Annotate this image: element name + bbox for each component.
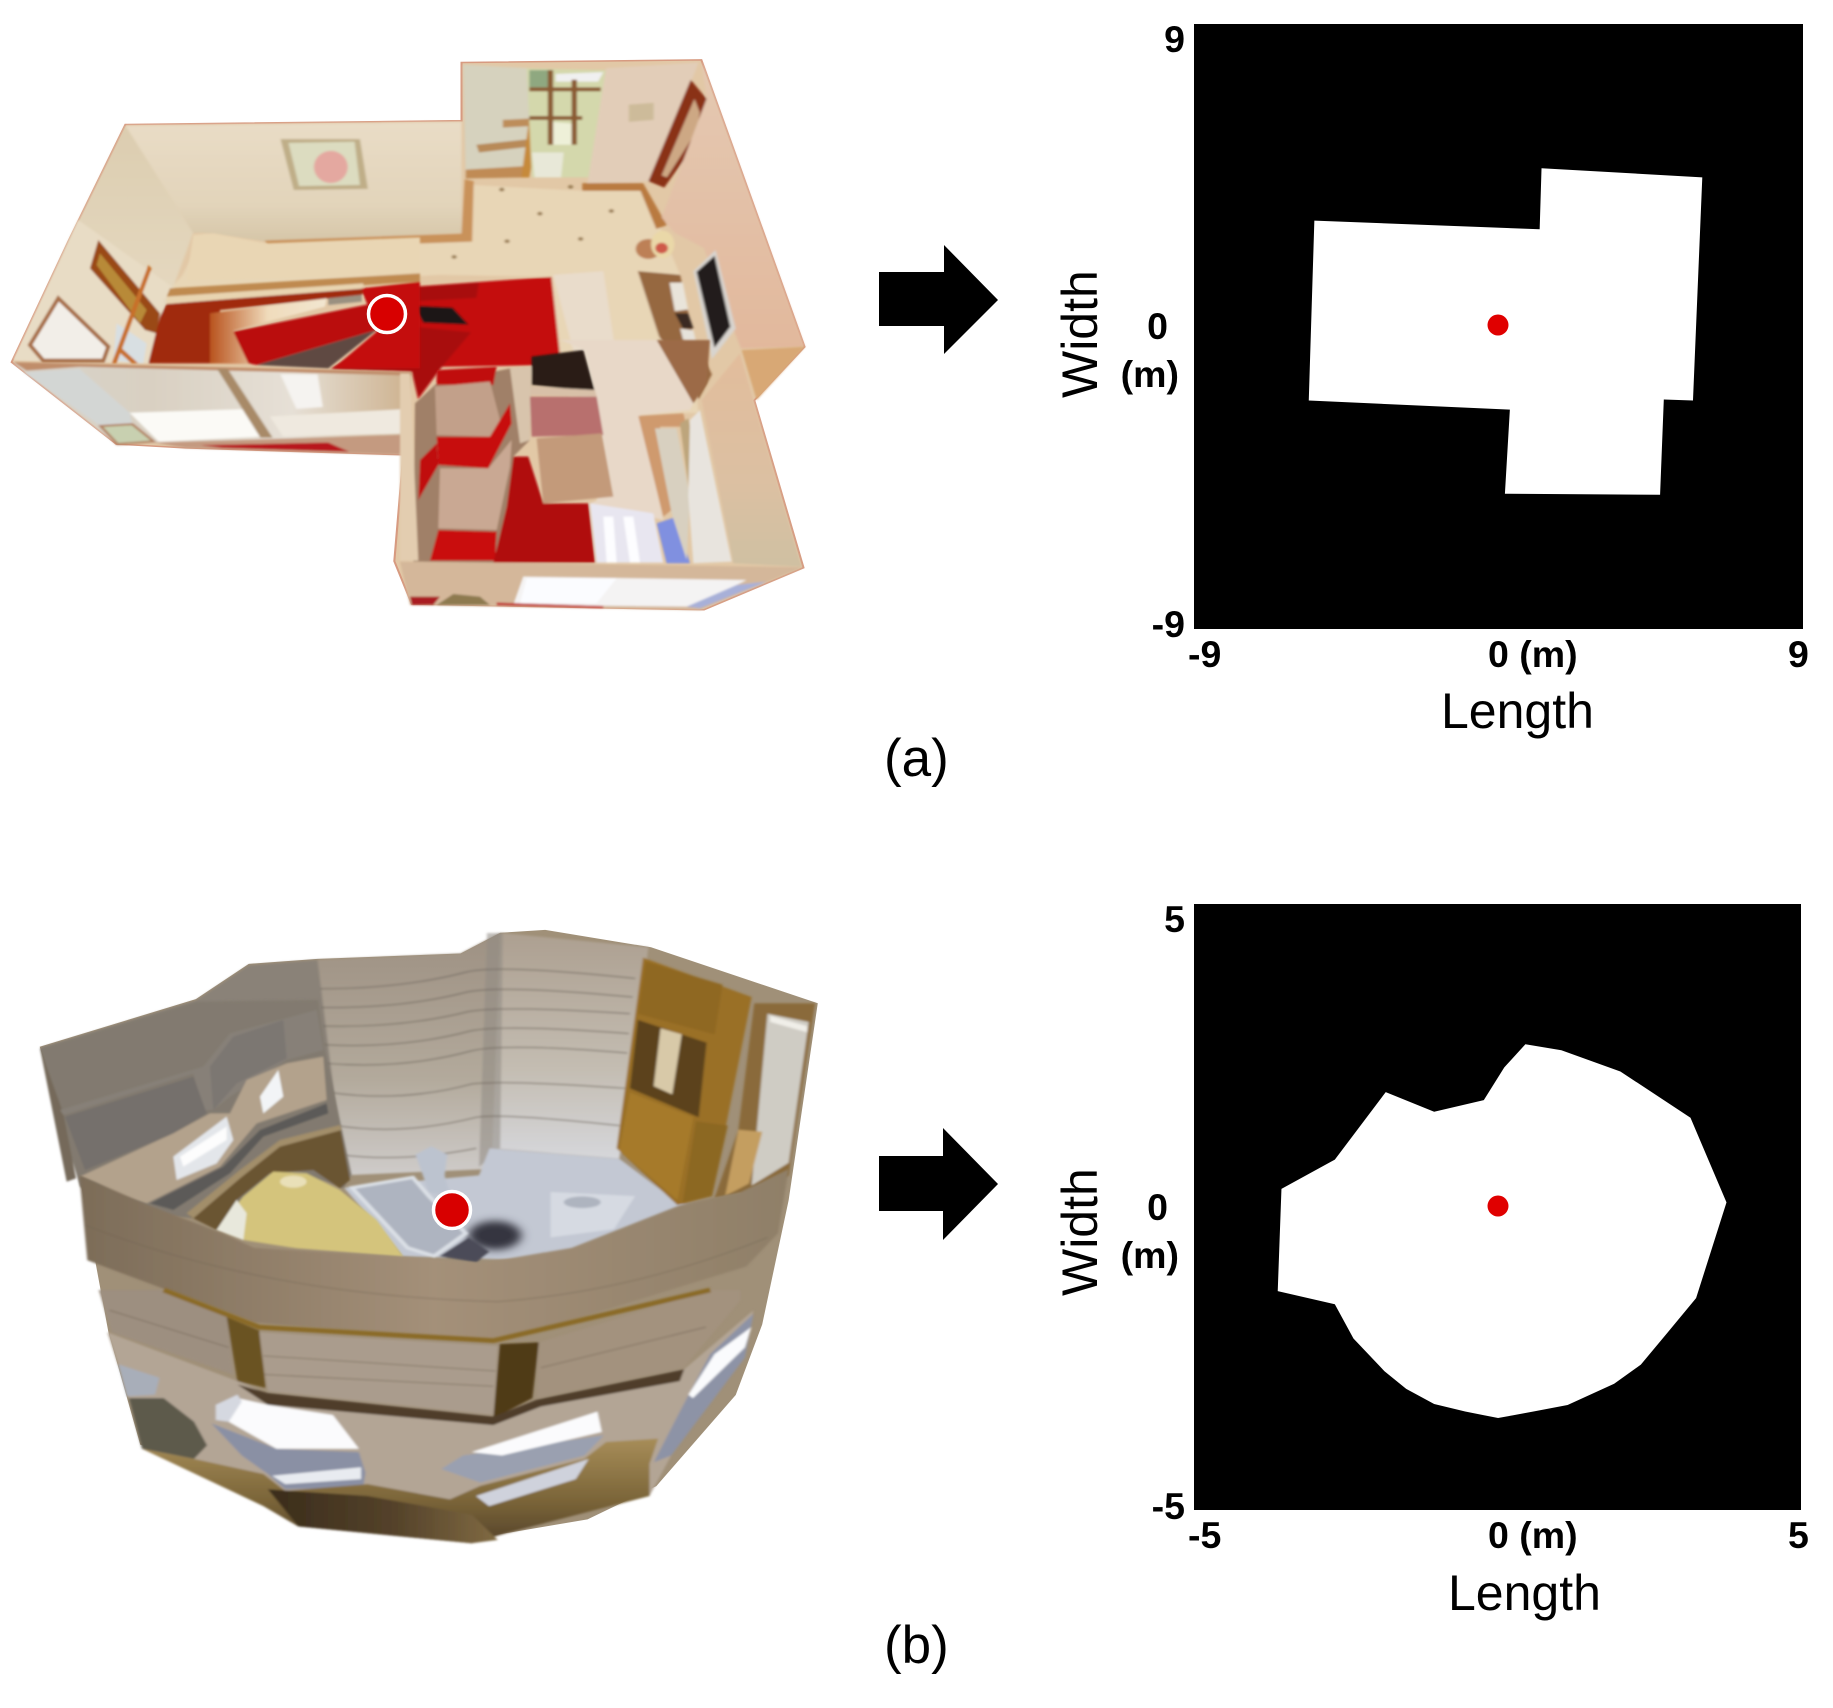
- axis labels (a): (m): [1121, 353, 1179, 395]
- upper grey wall: [60, 1010, 323, 1115]
- upper room contents: [15, 61, 805, 505]
- inner grey wall: [210, 1020, 287, 1110]
- bottom strip with red reflections: [153, 435, 403, 455]
- lower-right room of (a): [400, 340, 805, 610]
- axis labels (a): [1052, 18, 1809, 739]
- map background: [1194, 904, 1801, 1510]
- axis labels (b): 5: [1788, 1514, 1809, 1556]
- left wall: [13, 220, 177, 363]
- axis labels (b): 0: [1147, 1186, 1168, 1228]
- center panel: [259, 1332, 498, 1415]
- left back wall: [41, 960, 344, 1208]
- axis labels (b): 5: [1164, 898, 1185, 940]
- viewpoint dot: [1488, 314, 1508, 336]
- high door: [90, 240, 160, 333]
- red cushion: [233, 304, 377, 365]
- wide window: [173, 1117, 233, 1180]
- door: [648, 80, 707, 188]
- floor dark spot: [468, 1221, 521, 1250]
- hall wall: [588, 63, 699, 183]
- chart: floor map (b): [1194, 904, 1801, 1510]
- base floor band: [142, 1439, 658, 1543]
- front wall band of room (b): [79, 1169, 789, 1343]
- front wall: [400, 562, 803, 610]
- lower wall strip: [107, 1310, 754, 1543]
- console end: [657, 340, 710, 403]
- caption (b): (b): [884, 1616, 949, 1675]
- axis labels (b): [1052, 898, 1809, 1621]
- glass table: [113, 323, 147, 363]
- floor: [169, 185, 699, 505]
- left window: [118, 1364, 159, 1396]
- panel: 3D room view (b): [40, 930, 818, 1543]
- room body upper: [40, 930, 818, 1540]
- floor: [344, 1148, 728, 1260]
- white curtain: [688, 410, 732, 563]
- left shelves of room (b): [40, 1000, 403, 1257]
- pink blanket: [530, 397, 603, 437]
- arrow (a): [879, 245, 998, 354]
- wooden cabinet: [617, 958, 752, 1205]
- lower grey wall: [65, 1077, 207, 1170]
- wooden shelf: [190, 1127, 350, 1230]
- room footprint: [1278, 1044, 1726, 1418]
- room silhouette base: [40, 930, 818, 1540]
- doorway: [715, 1003, 815, 1215]
- axis labels (a): 9: [1788, 633, 1809, 675]
- rail: [164, 1290, 710, 1341]
- outer wall: [40, 1000, 352, 1220]
- orange rail: [112, 265, 152, 363]
- small window: [101, 424, 153, 444]
- skirting board: [265, 179, 474, 249]
- skirting lines: [167, 273, 420, 297]
- right window: [654, 1314, 754, 1462]
- red sofa and rug: [331, 277, 561, 399]
- center-left window: [211, 1395, 365, 1489]
- sofa base: [413, 367, 532, 563]
- room footprint: [1309, 168, 1702, 495]
- marker: room (a) viewpoint: [368, 296, 406, 332]
- right wall: [662, 61, 805, 348]
- small arched window: [260, 1070, 283, 1113]
- right wall: [702, 353, 802, 567]
- carpet: [560, 340, 693, 520]
- TV: [693, 250, 736, 359]
- low door: [30, 298, 108, 361]
- right panel: [537, 1290, 741, 1398]
- tan wall: [80, 1057, 327, 1203]
- caption (a): (a): [884, 729, 949, 788]
- yellow shell chair: [217, 1172, 403, 1257]
- wall rim corner: [742, 347, 805, 400]
- grey object: [328, 295, 362, 305]
- axis labels (b): Length: [1448, 1565, 1601, 1621]
- staircase window: [527, 68, 609, 177]
- axis labels (a): Width: [1052, 270, 1108, 398]
- arrow (b): [879, 1128, 998, 1240]
- tan block 1: [435, 382, 500, 437]
- floor dots: [311, 185, 614, 263]
- stair hall: [463, 64, 529, 178]
- window frame: [638, 413, 687, 517]
- table fringe: [532, 350, 595, 392]
- tan blanket: [537, 433, 613, 503]
- center column: [318, 933, 500, 1175]
- left wall top: [15, 126, 193, 362]
- red floor: [493, 457, 595, 563]
- map background: [1194, 24, 1803, 629]
- front wall of room (a): [13, 362, 412, 455]
- marker: room (b) viewpoint: [434, 1192, 470, 1228]
- axis labels (a): -9: [1152, 603, 1185, 645]
- red block: [437, 403, 512, 468]
- red seat top: [437, 367, 497, 385]
- shadow band: [237, 1369, 684, 1425]
- grey throw: [257, 330, 377, 368]
- axis labels (a): 0 (m): [1488, 633, 1578, 675]
- room upper half: [12, 60, 805, 610]
- curtain wall: [13, 363, 412, 444]
- axis labels (a): Length: [1441, 683, 1594, 739]
- left column: [40, 1048, 76, 1182]
- axis labels (b): Width: [1052, 1168, 1108, 1296]
- chair: [352, 1146, 490, 1262]
- axis labels (b): -5: [1152, 1485, 1185, 1527]
- panel lines: [110, 1310, 706, 1386]
- viewpoint dot: [1488, 1196, 1508, 1216]
- red seat bottom: [430, 530, 497, 561]
- lower front of room (b): [99, 1290, 754, 1543]
- left side of room (a): [13, 220, 420, 368]
- left wall trim: [400, 373, 418, 561]
- tan block 2: [438, 440, 512, 530]
- red-brown curtain: [148, 288, 367, 363]
- sunlit floor: [590, 503, 690, 563]
- floor strip: [187, 233, 420, 280]
- axis labels (a): 9: [1164, 18, 1185, 60]
- dark posts: [227, 1317, 266, 1388]
- axis labels (b): 0 (m): [1488, 1514, 1578, 1556]
- center-right window: [441, 1412, 604, 1506]
- wall lines: [320, 969, 635, 1158]
- room silhouette base: [12, 60, 805, 610]
- axis labels (b): -5: [1188, 1514, 1221, 1556]
- axis labels (b): (m): [1121, 1234, 1179, 1276]
- right back wall: [492, 933, 648, 1159]
- back wall: [125, 122, 462, 241]
- panel: 3D room view (a): [12, 60, 805, 610]
- beige gap: [510, 367, 532, 443]
- red sofa: [333, 282, 420, 368]
- axis labels (a): 0: [1147, 305, 1168, 347]
- dark shadow: [413, 306, 468, 325]
- carpet texture: [553, 271, 651, 505]
- TV console: [638, 271, 712, 399]
- cream curtain: [210, 298, 327, 364]
- left panel: [99, 1290, 233, 1374]
- axis labels (a): -9: [1188, 633, 1221, 675]
- picture on wall: [281, 139, 368, 190]
- back walls and floor: [41, 933, 815, 1262]
- chart: floor map (a): [1194, 24, 1803, 629]
- dark object: [129, 1398, 207, 1459]
- dark band: [150, 1103, 328, 1210]
- basket: [636, 231, 674, 259]
